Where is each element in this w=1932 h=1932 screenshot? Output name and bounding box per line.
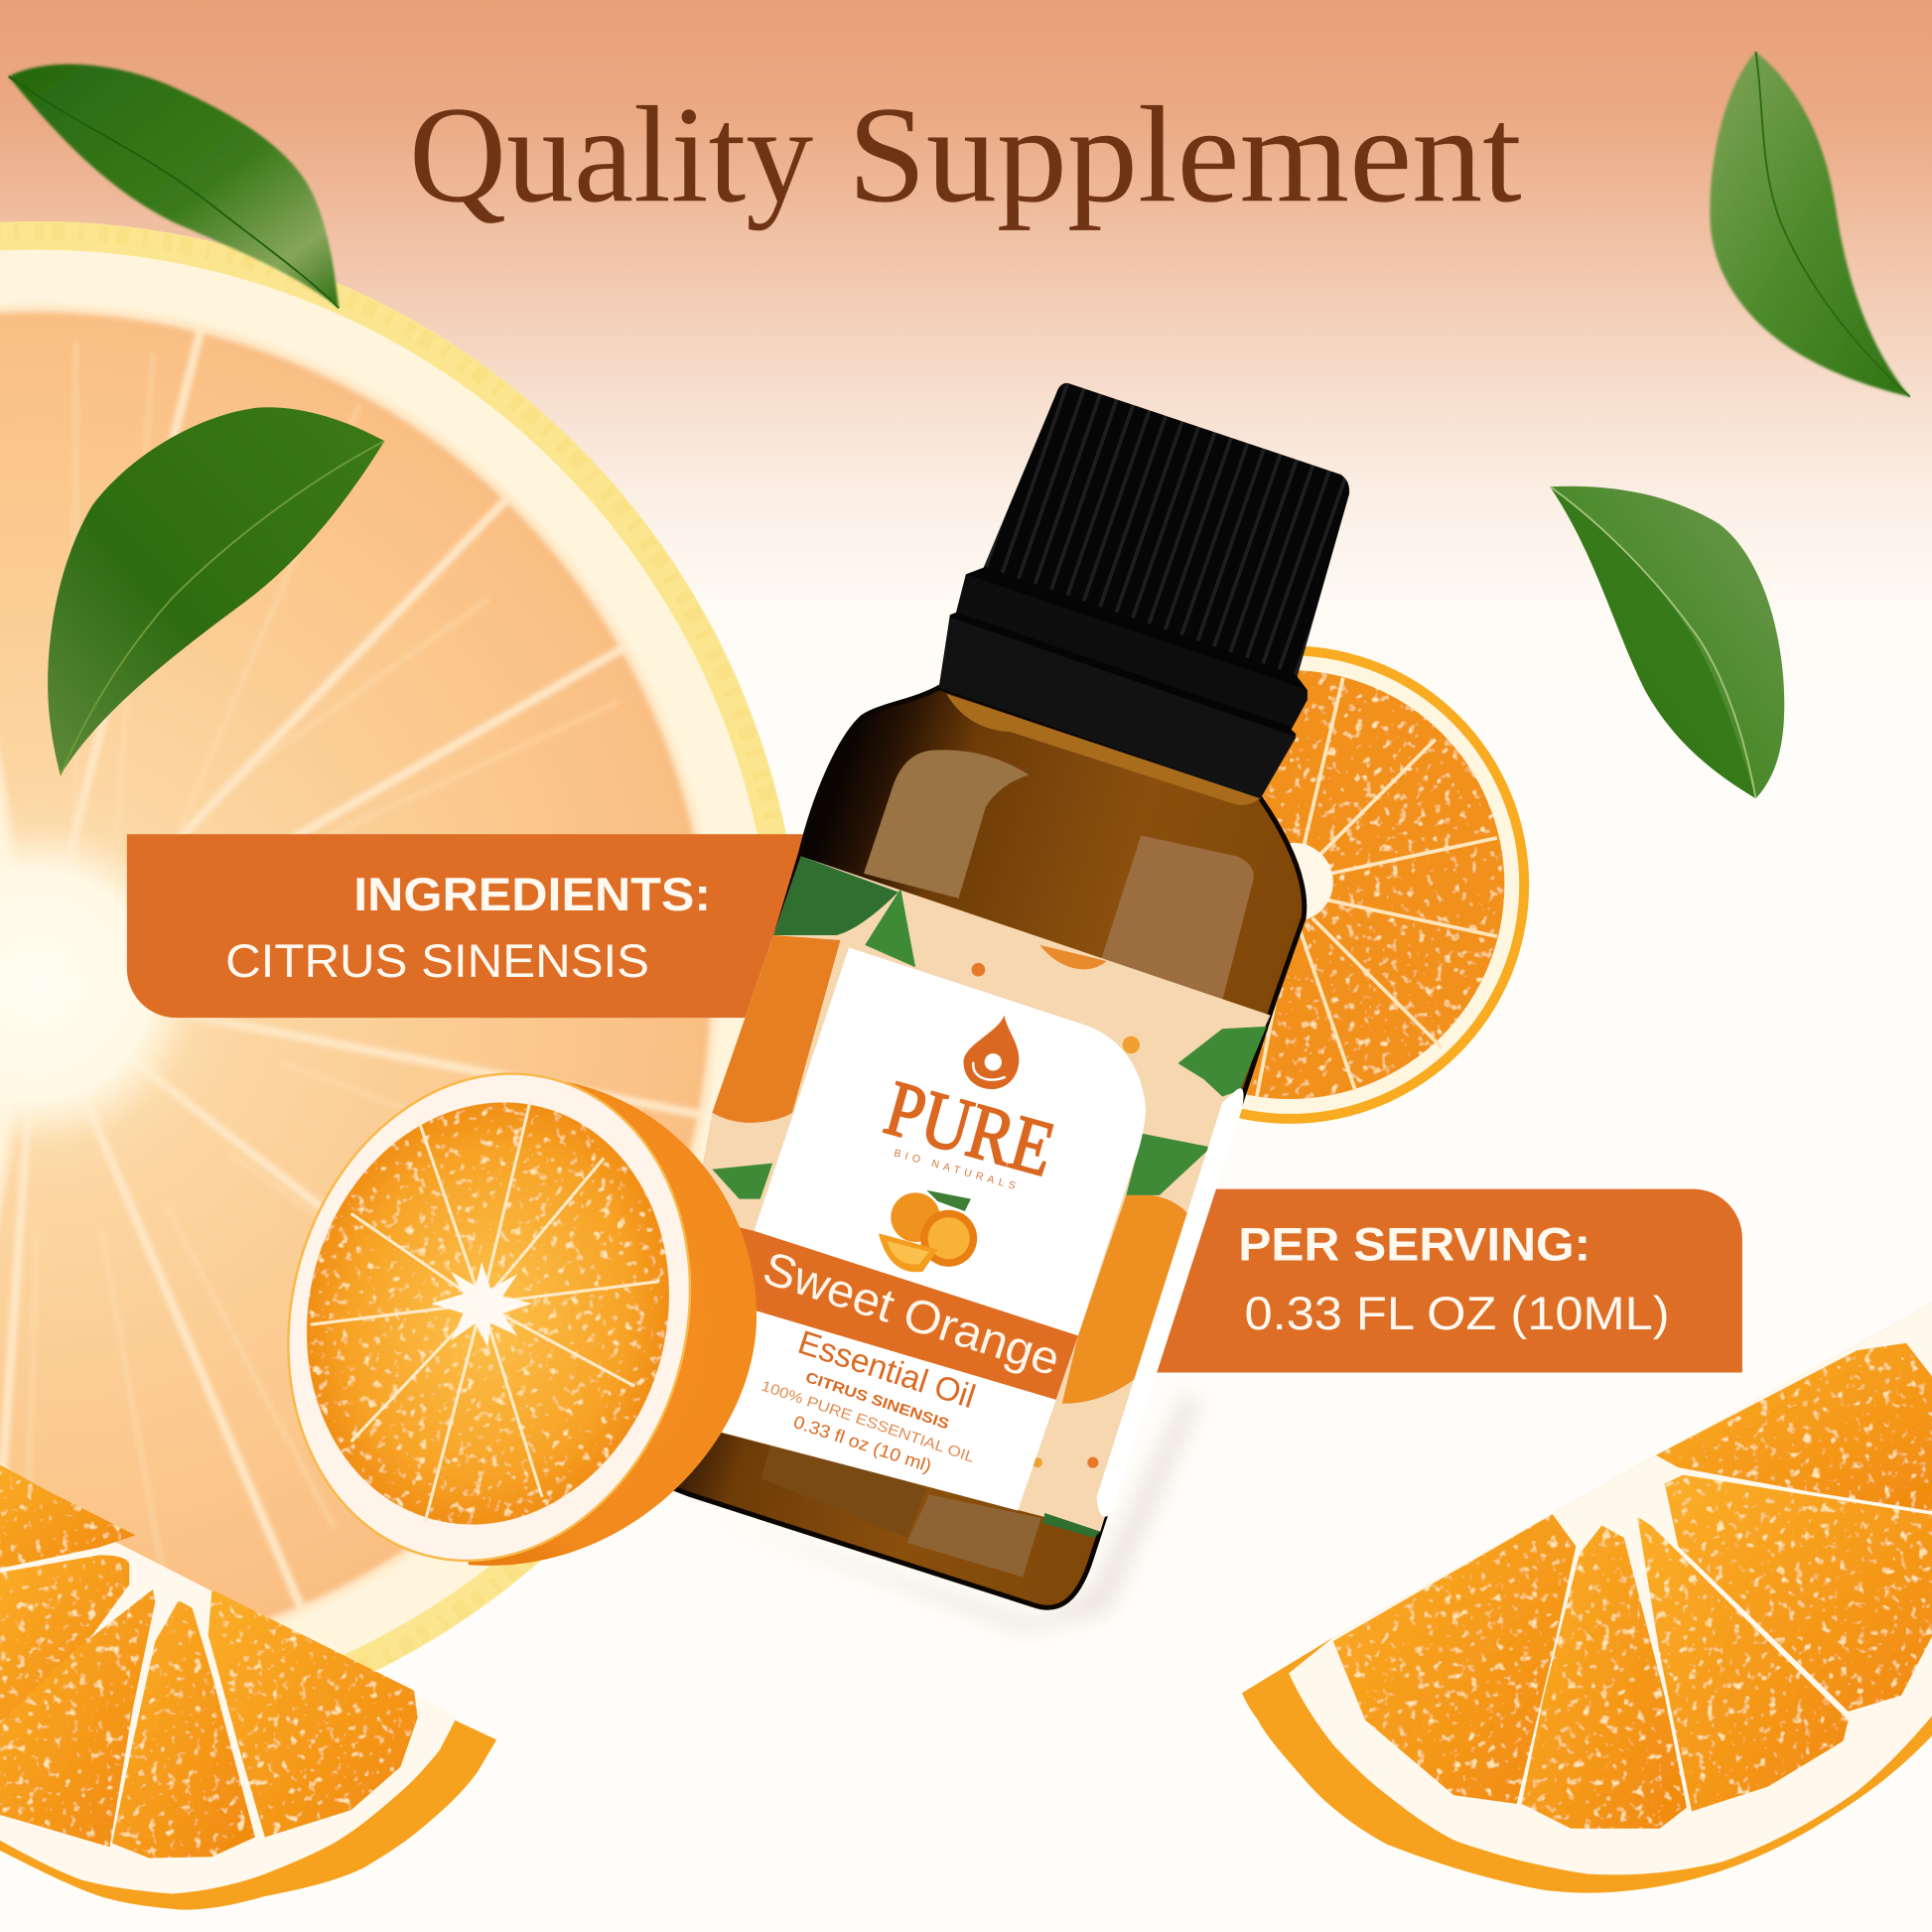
- glass body: [617, 688, 1305, 1607]
- logo drop icon: [964, 1016, 1019, 1089]
- orange half centre star: [431, 1262, 532, 1348]
- leaf top left: [9, 65, 339, 308]
- title: Quality: [409, 78, 813, 231]
- sweet orange band: [690, 1220, 1078, 1400]
- title: [409, 78, 1522, 231]
- volume: 0.33 fl oz (10 ml): [791, 1412, 934, 1476]
- cap ribs: [981, 383, 1349, 680]
- ingredients value: CITRUS SINENSIS: [225, 934, 649, 987]
- callout band: per serving: [1109, 1189, 1742, 1373]
- label orange shapes: [712, 935, 1189, 1468]
- ingredients label: INGREDIENTS:: [353, 868, 711, 920]
- white logo panel: [755, 947, 1146, 1335]
- glass highlights: [761, 750, 1254, 1578]
- callout band: ingredients: [127, 834, 838, 1018]
- per serving value: 0.33 FL OZ (10ML): [1244, 1287, 1670, 1339]
- neck highlight: [946, 694, 1261, 805]
- wedge segments right: [1333, 1343, 1932, 1829]
- brand name: PURE: [877, 1064, 1063, 1193]
- title: Supplement: [848, 78, 1522, 231]
- orange wedge bottom left: [0, 1453, 496, 1910]
- brand subtitle: BIO NATURALS: [893, 1147, 1017, 1192]
- cap lower ring: [939, 618, 1297, 798]
- wedge segments left: [0, 1457, 418, 1859]
- bottle: [617, 383, 1349, 1632]
- leaf right: [1550, 486, 1784, 798]
- small orange icon: [879, 1190, 977, 1272]
- bottle shadow: [702, 1392, 1201, 1632]
- small orange slice behind bottle: [1051, 645, 1529, 1124]
- cap collar backing: [939, 567, 1308, 798]
- per serving label: PER SERVING:: [1238, 1218, 1590, 1271]
- white strip right edge of label: [1097, 1088, 1244, 1517]
- lower white label panel: [690, 1292, 1056, 1511]
- faded large orange slice: [0, 221, 801, 1750]
- orange wedge bottom right: [1242, 1297, 1932, 1893]
- leaf middle left: [48, 407, 384, 775]
- purity statement: 100% PURE ESSENTIAL OIL: [759, 1379, 976, 1466]
- essential oil: Essential Oil: [793, 1324, 980, 1416]
- botanical name: CITRUS SINENSIS: [803, 1370, 951, 1433]
- cap upper ring: [956, 574, 1308, 727]
- label background: [653, 857, 1271, 1532]
- label leaves: [712, 857, 1267, 1538]
- sweet orange name: Sweet Orange: [758, 1241, 1066, 1386]
- orange half: [235, 1029, 757, 1606]
- leaf top right: [1710, 52, 1910, 397]
